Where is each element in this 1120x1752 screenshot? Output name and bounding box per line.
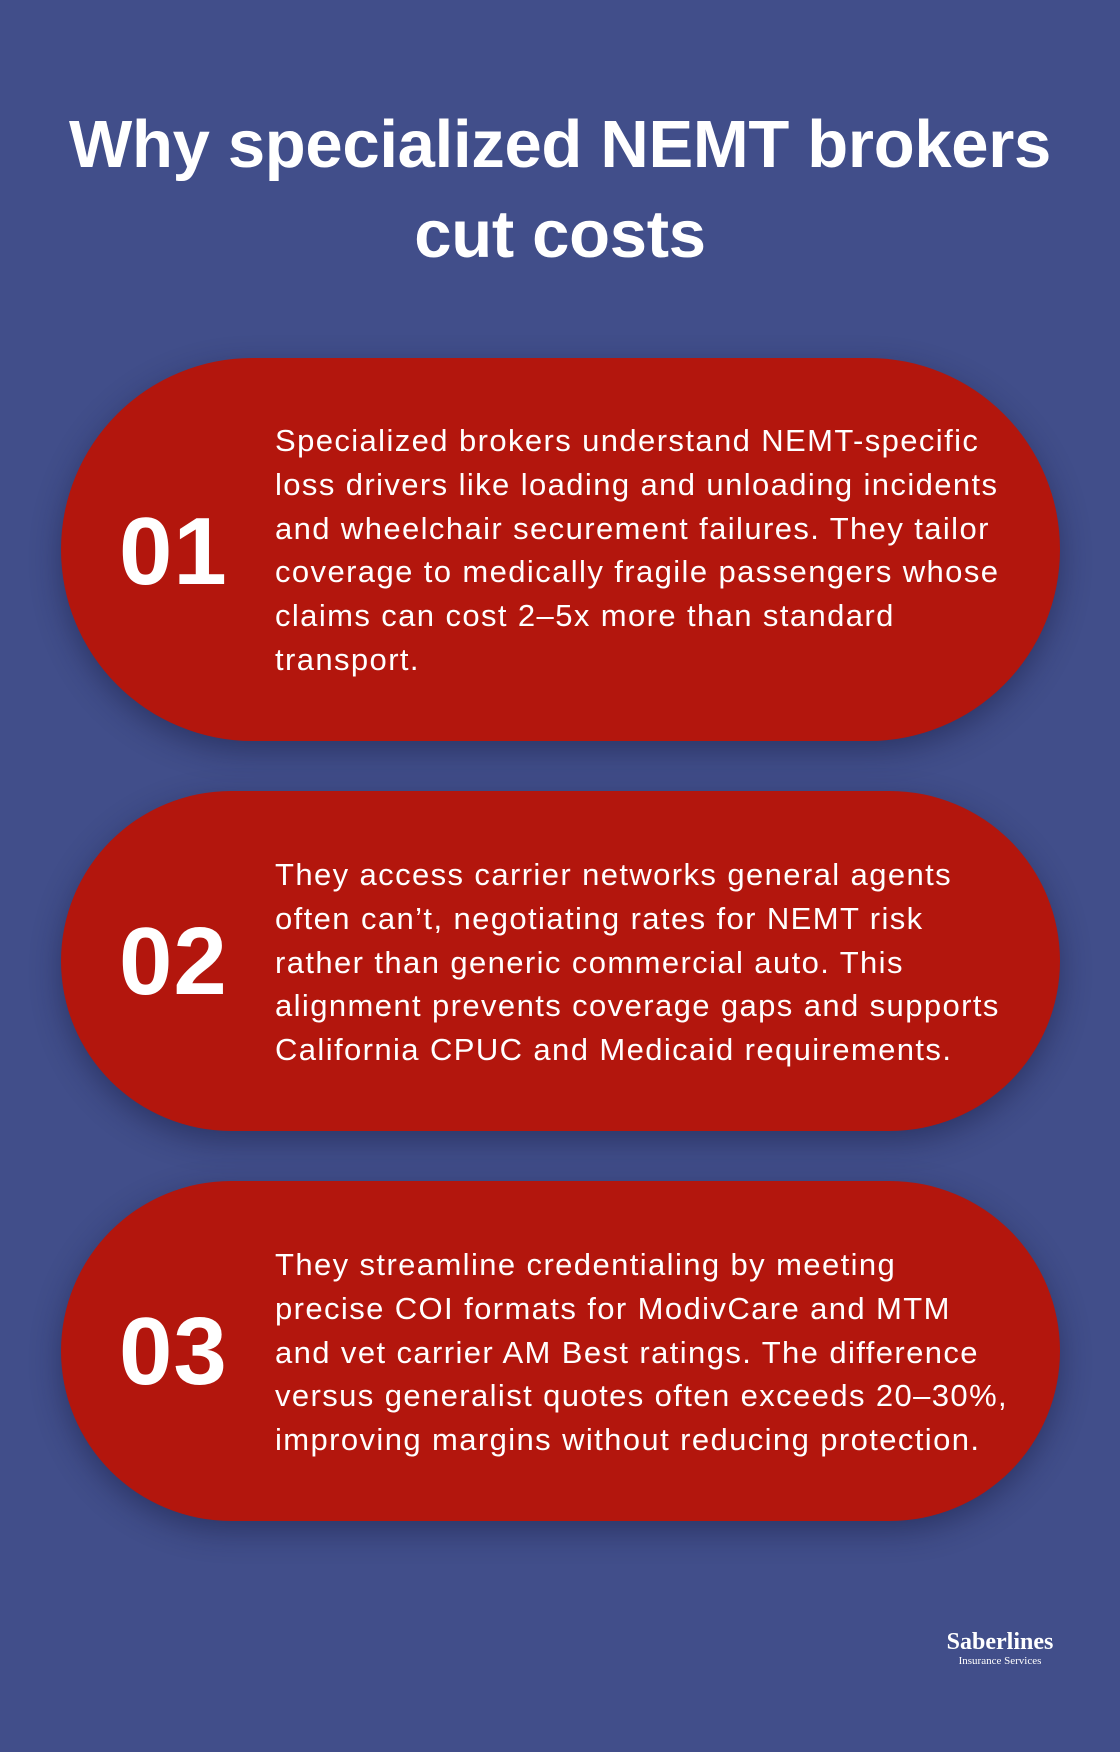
logo: Insurance Services [959,1655,1041,1667]
text block 02: often can’t, negotiating rates for NEMT risk [275,901,924,936]
text block 01: claims can cost 2–5x more than standard [275,598,895,633]
title: cut costs [414,197,706,272]
text block 02: They access carrier networks general agents [275,857,952,892]
title [69,107,1051,272]
text block 01: coverage to medically fragile passengers whose [275,554,999,589]
text block 01: and wheelchair securement failures. They tailor [275,511,990,546]
panel: card 01 [61,358,1060,741]
text block 03: and vet carrier AM Best ratings. The difference [275,1335,979,1370]
panel: card 02 [61,791,1060,1131]
text block 01: Specialized brokers understand NEMT-specific [275,423,979,458]
title: Why specialized NEMT brokers [69,107,1051,182]
text block 01: loss drivers like loading and unloading incidents [275,467,998,502]
text block 02 [275,857,1000,1067]
number 03: 03 [119,1298,228,1405]
text block 01: transport. [275,642,420,677]
logo: Saberlines [947,1629,1053,1655]
text block 03 [275,1247,1008,1457]
text block 02: California CPUC and Medicaid requirements. [275,1032,952,1067]
number 01: 01 [119,498,228,605]
text block 03: They streamline credentialing by meeting [275,1247,896,1282]
text block 02: rather than generic commercial auto. This [275,945,904,980]
text block 03: improving margins without reducing protection. [275,1422,980,1457]
panel: card 03 [61,1181,1060,1521]
text block 02: alignment prevents coverage gaps and supports [275,988,1000,1023]
text block 01 [275,423,999,677]
text block 03: versus generalist quotes often exceeds 20–30%, [275,1378,1008,1413]
logo [947,1629,1053,1667]
text block 03: precise COI formats for ModivCare and MTM [275,1291,951,1326]
number 02: 02 [119,908,228,1015]
